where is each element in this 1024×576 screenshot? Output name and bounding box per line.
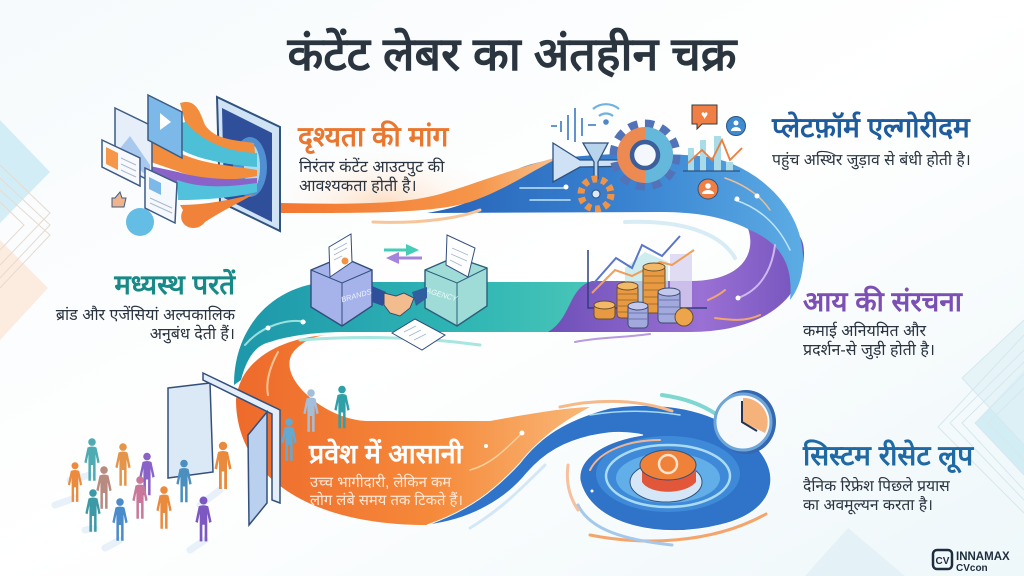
icon: thumbs up xyxy=(112,192,126,207)
icon: brands document xyxy=(329,234,352,277)
icon: clock xyxy=(715,390,776,454)
text block: system reset loop xyxy=(802,439,974,515)
icon: mini bar chart xyxy=(683,136,742,171)
ribbon: purple income band xyxy=(548,222,804,332)
text block: visibility demand xyxy=(297,120,450,195)
logo: Innamax CVcon: INNAMAX xyxy=(956,551,1010,563)
icon: wifi xyxy=(593,104,619,116)
icon: small gear xyxy=(581,179,611,209)
ribbon: cream glow behind first step xyxy=(306,166,460,206)
text block: ease of entry xyxy=(308,438,464,509)
ribbon: streaks xyxy=(245,178,790,545)
icon: exchange arrows xyxy=(384,244,422,264)
icon: reset button xyxy=(630,450,702,502)
icon: browser card image xyxy=(115,108,152,182)
heading: प्रवेश में आसानी xyxy=(308,438,464,469)
coin stacks xyxy=(594,263,693,328)
icon: teal blob xyxy=(126,208,154,236)
logo: Innamax CVcon: CVcon xyxy=(956,563,988,574)
ribbon: orange top band xyxy=(280,156,562,213)
body: कमाई अनियमित और xyxy=(803,321,926,340)
icon: handshake xyxy=(372,286,427,316)
chart blue line xyxy=(594,236,680,283)
ribbon: teal band xyxy=(234,282,610,385)
body: ब्रांड और एजेंसियां अल्पकालिक xyxy=(56,305,236,324)
chart orange line xyxy=(592,250,694,293)
text block: intermediary layers: अनुबंध देती हैं। xyxy=(150,324,235,344)
text block: visibility demand: आवश्यकता होती है। xyxy=(299,176,417,195)
icon: left door xyxy=(168,383,213,478)
body: उच्च भागीदारी, लेकिन कम xyxy=(310,473,452,491)
chart axes xyxy=(588,250,707,308)
icon: contract xyxy=(392,319,445,350)
icon: tablet screen xyxy=(217,97,280,231)
icon: brands box: BRANDS xyxy=(340,287,373,304)
ribbon: orange entry band xyxy=(236,335,590,525)
icon: megaphone funnel xyxy=(553,143,640,182)
icon: door frame xyxy=(203,373,280,503)
icon: agency box: AGENCY xyxy=(424,286,459,304)
icon: profile circle orange xyxy=(698,179,718,199)
heading: प्लेटफ़ॉर्म एल्गोरीदम xyxy=(771,111,971,143)
icon: people shadows xyxy=(55,475,220,550)
text block: ease of entry: लोग लंबे समय तक टिकते हैं। xyxy=(310,491,463,509)
heading: मध्यस्थ परतें xyxy=(113,268,236,300)
icon: sound wave xyxy=(551,108,596,142)
icon: algorithm gears and charts xyxy=(551,104,746,209)
icon: door with crowd xyxy=(55,373,350,550)
body: दैनिक रिफ्रेश पिछले प्रयास xyxy=(803,476,950,495)
heading: दृश्यता की मांग xyxy=(297,120,450,154)
icon: large gear xyxy=(614,124,676,186)
ribbon: blue swirl xyxy=(427,405,771,531)
icon: content funnel into screen xyxy=(102,95,280,236)
text block: platform algorithm xyxy=(771,111,971,170)
ribbon: blue platform band xyxy=(427,154,803,300)
ribbon: flow path xyxy=(234,143,804,545)
icon: brands agency handshake xyxy=(311,234,487,350)
icon: crowd xyxy=(68,386,350,541)
icon: rising chart with coins xyxy=(588,236,707,328)
icon: right door xyxy=(248,412,267,525)
text block: income structure: प्रदर्शन-से जुड़ी होती है। xyxy=(803,340,935,360)
text block: system reset loop: का अवमूल्यन करता है। xyxy=(803,495,933,515)
title: कंटेंट लेबर का अंतहीन चक्र xyxy=(287,27,739,80)
heading: आय की संरचना xyxy=(803,285,964,317)
icon: browser card bottom xyxy=(145,168,177,223)
text block: intermediary layers xyxy=(56,268,236,344)
icon: browser card video xyxy=(148,95,182,158)
logo: Innamax CVcon: CV xyxy=(936,556,950,567)
body: पहुंच अस्थिर जुड़ाव से बंधी होती है। xyxy=(772,150,971,170)
ribbon: sparkles xyxy=(266,184,760,492)
icon: chat heart xyxy=(692,105,717,129)
body: निरंतर कंटेंट आउटपुट की xyxy=(299,157,445,177)
heading: सिस्टम रीसेट लूप xyxy=(802,439,974,474)
icon: profile circle blue xyxy=(726,116,746,136)
icon: agency scroll xyxy=(446,235,475,277)
icon: agency box xyxy=(424,257,487,326)
icon: algorithm gears and charts: ♥ xyxy=(701,108,708,122)
icon: reset button and clock xyxy=(630,390,776,502)
logo: Innamax CVcon xyxy=(933,550,1010,574)
text block: income structure xyxy=(803,285,964,360)
icon: brands box xyxy=(311,257,373,326)
icon: browser card text xyxy=(102,140,140,186)
chart bars xyxy=(625,252,668,308)
icon: coloured streams xyxy=(180,102,255,153)
